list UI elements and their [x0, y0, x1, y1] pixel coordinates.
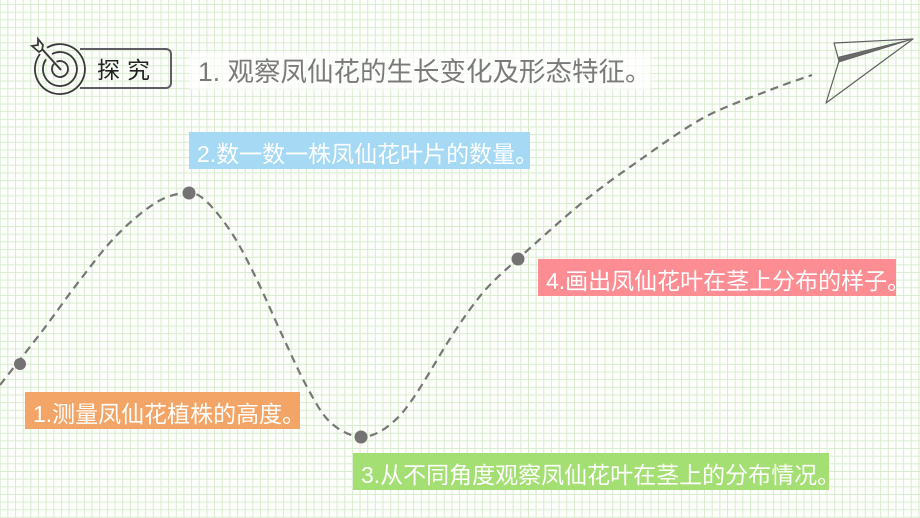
label 2 [189, 132, 530, 169]
label 3 [353, 453, 829, 490]
label 4 [538, 259, 896, 296]
label 2: 2.数一数一株凤仙花叶片的数量。 [197, 141, 530, 167]
tag text: 探究 [97, 57, 157, 83]
tag outline [80, 48, 172, 89]
label 3: 3.从不同角度观察凤仙花叶在茎上的分布情况。 [361, 462, 829, 488]
title: 1. 观察凤仙花的生长变化及形态特征。 [198, 57, 651, 87]
heading tag: 探究 [80, 48, 172, 89]
label 1 [25, 392, 300, 429]
label 1: 1.测量凤仙花植株的高度。 [33, 401, 300, 427]
